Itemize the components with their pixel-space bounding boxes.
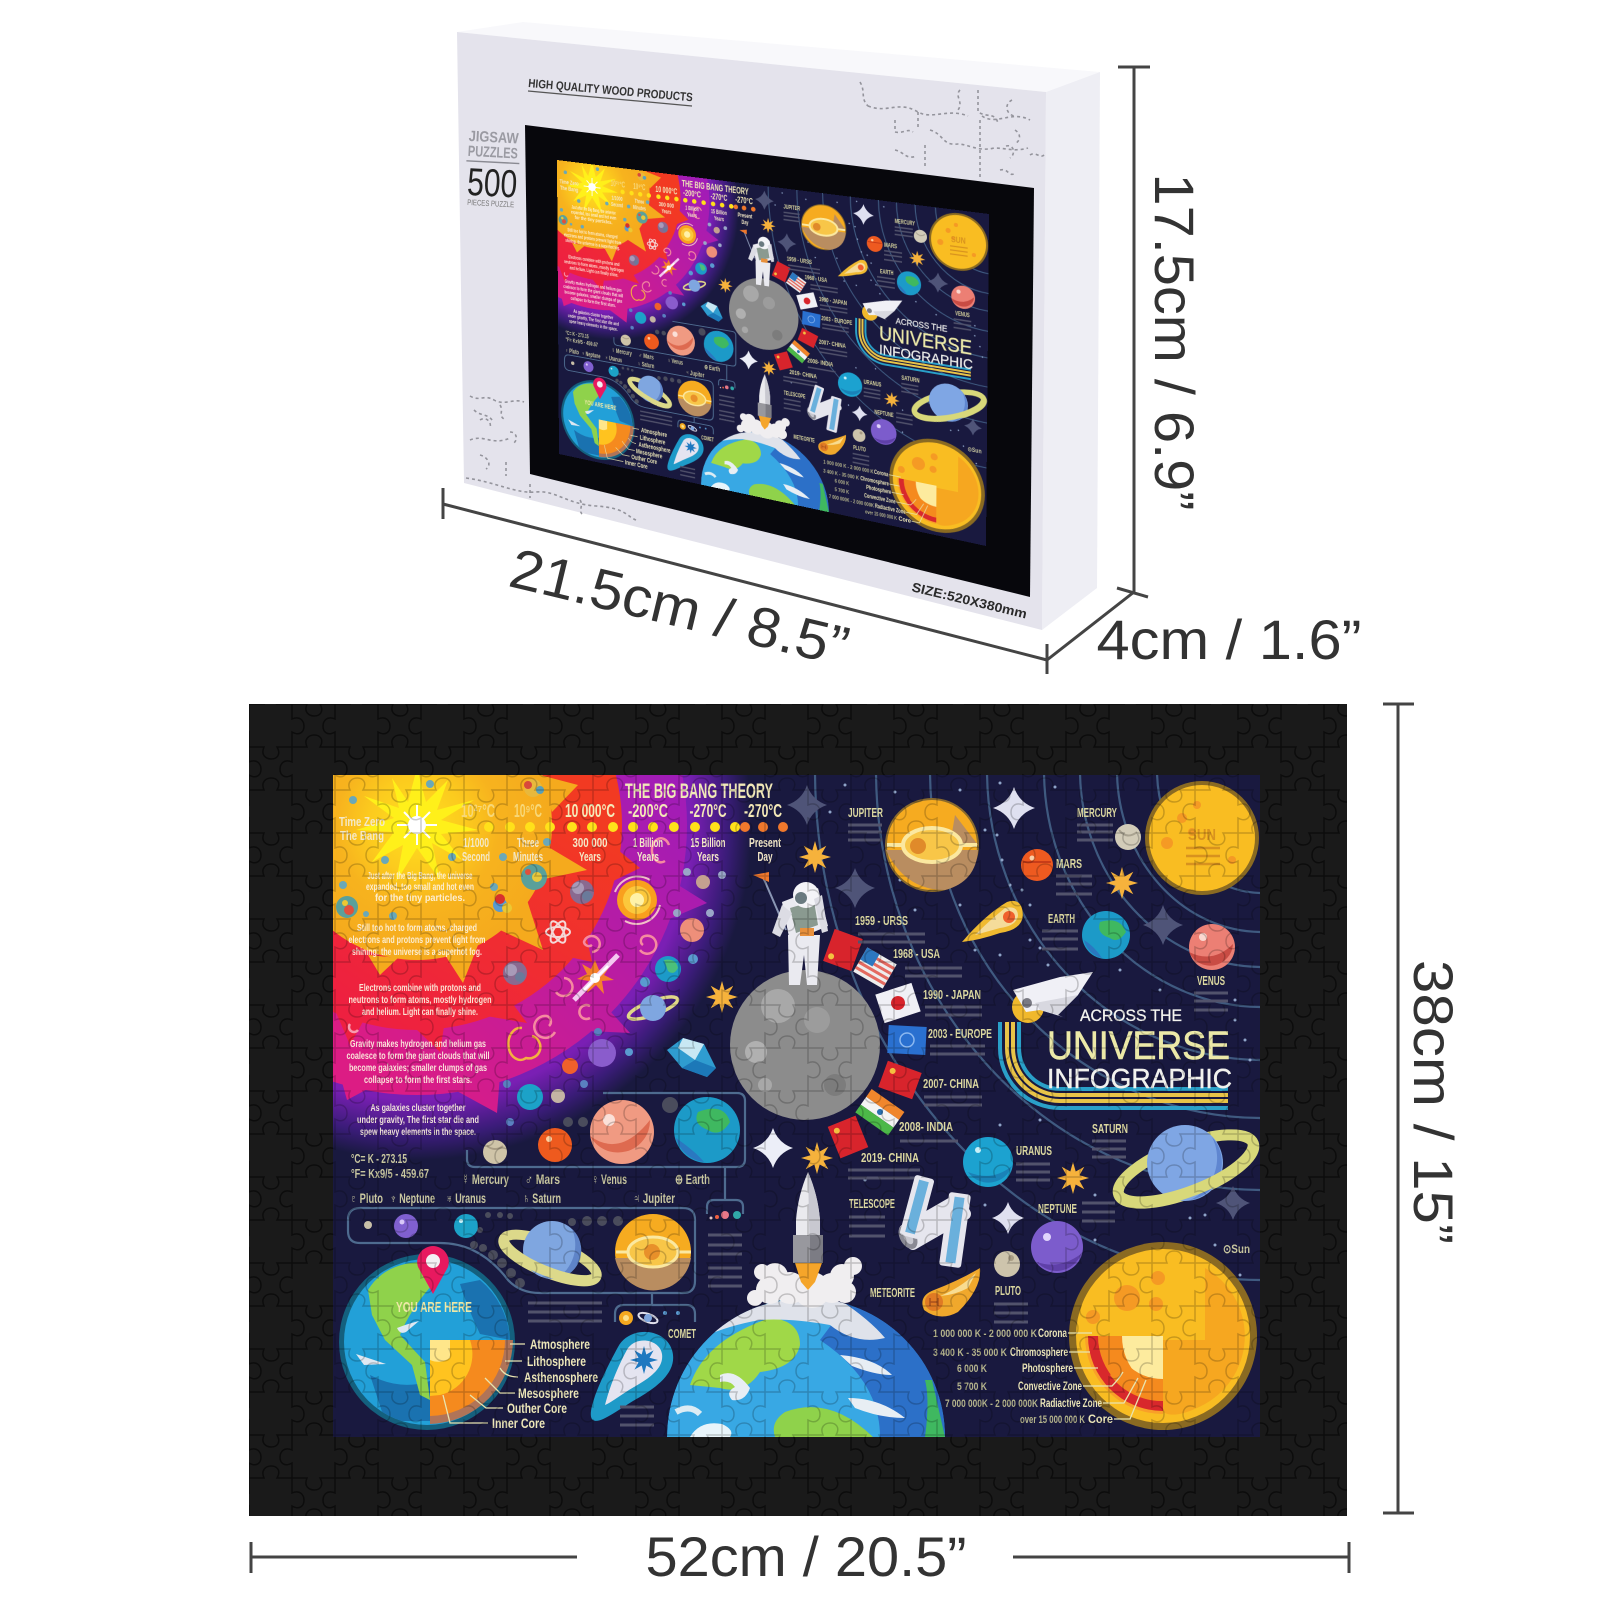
timeline labels: Day (758, 849, 773, 864)
sun layer labels: 1 000 000 K - 2 000 000 K (933, 1328, 1037, 1340)
box front face (457, 32, 1046, 630)
comet icon (591, 1332, 673, 1421)
earth layer labels: Mesosphere (518, 1385, 579, 1401)
timeline dots (484, 822, 788, 832)
sun top: SUN (1188, 827, 1216, 844)
planet symbols row one: ⊕ Earth (675, 1171, 710, 1187)
box heading: HIGH QUALITY WOOD PRODUCTS (528, 76, 693, 104)
timeline labels: Second (462, 849, 490, 864)
main title: ACROSS THE (1080, 1006, 1182, 1025)
box jigsaw puzzles caption (464, 128, 521, 209)
comet top (962, 901, 1023, 942)
scattered stars (828, 782, 1252, 1276)
planet: jupiter medium (615, 1214, 691, 1290)
sparkle stars (753, 785, 1250, 1234)
dimension: box height (1117, 67, 1206, 597)
yellow core with spikes (282, 690, 552, 960)
mission labels: 2007- CHINA (923, 1076, 979, 1091)
sun layer labels: Photosphere (1022, 1361, 1073, 1375)
planet labels right side: METEORITE (870, 1285, 915, 1300)
dimension: box width (443, 488, 1047, 678)
sun cross-section (1069, 1242, 1257, 1430)
timeline temperatures (461, 801, 782, 821)
timeline temperatures: -270°C (744, 801, 782, 821)
timeline temperatures: 10²⁷°C (461, 801, 495, 821)
planet: jupiter large (886, 799, 978, 891)
timeline labels: Years (579, 849, 601, 864)
planet: neptune large (1031, 1221, 1083, 1273)
comet label: COMET (668, 1326, 696, 1341)
planet symbols row two: ♅ Uranus (446, 1190, 486, 1206)
nebulae and atoms in the red ring (503, 880, 594, 985)
big bang paragraphs (346, 871, 492, 1138)
planet: mars medium (538, 1128, 572, 1162)
planet labels right side: VENUS (1197, 973, 1225, 988)
big bang paragraphs: become galaxies; smaller clumps of gas (349, 1063, 487, 1074)
earth layer labels: Inner Core (492, 1415, 545, 1431)
outer planets bracket (348, 1208, 695, 1322)
timeline labels: Years (697, 849, 719, 864)
big bang paragraphs: collapse to form the first stars. (364, 1075, 472, 1086)
dimension: puzzle width: 52cm / 20.5” (646, 1525, 966, 1588)
box jigsaw puzzles caption: PUZZLES (467, 143, 518, 162)
space telescope (895, 1174, 973, 1268)
planet: saturn medium (498, 1221, 602, 1291)
timeline labels: 15 Billion (690, 835, 726, 850)
timeline labels: Years (637, 849, 659, 864)
orbit lines (670, 186, 1260, 1282)
mission labels (848, 913, 992, 1178)
cross-section earth (339, 1254, 515, 1430)
galaxy streak (574, 955, 618, 1000)
mission labels: 2008- INDIA (899, 1119, 953, 1134)
meteorite (922, 1268, 980, 1317)
timeline labels: The Bang (340, 828, 384, 843)
timeline labels: Three (517, 835, 539, 850)
planet: earth large (1082, 911, 1130, 959)
box jigsaw puzzles caption: 500 (466, 161, 518, 206)
planet: venus medium (590, 1100, 654, 1164)
planet: pluto large (994, 1251, 1020, 1277)
mission labels: 2003 - EUROPE (928, 1026, 992, 1041)
planet: venus large (1189, 924, 1235, 970)
dimension: box depth (1047, 592, 1362, 671)
big earth (667, 1298, 945, 1576)
timeline labels: Minutes (513, 849, 543, 864)
temperature formulas: °F= Kx9/5 - 459.67 (351, 1166, 429, 1181)
big bang paragraphs: Still too hot to form atoms, charged (357, 923, 477, 934)
sun top (1145, 781, 1259, 895)
sun-like spiral star (615, 876, 660, 924)
timeline temperatures: -200°C (628, 801, 668, 821)
big bang paragraphs: As galaxies cluster together (370, 1103, 466, 1114)
earth layer labels (443, 1336, 598, 1431)
planet labels right side: TELESCOPE (849, 1196, 895, 1211)
sun layer labels: Corona (1038, 1326, 1067, 1340)
sun layer labels: 7 000 000K - 2 000 000K (945, 1398, 1038, 1410)
planet: earth medium (674, 1097, 740, 1163)
big bang paragraphs: Just after the Big Bang, the universe (368, 871, 473, 882)
timeline labels: Present (749, 835, 781, 850)
location pin (417, 1246, 449, 1294)
earth layer labels: Outher Core (507, 1400, 567, 1416)
planet: pluto small (364, 1221, 372, 1229)
temperature formulas (351, 1151, 429, 1181)
particles in the core (336, 779, 551, 920)
mission labels: 1959 - URSS (855, 913, 908, 928)
dimension: puzzle height: 38cm / 15” (1402, 960, 1465, 1244)
mini sun and saturn icons (619, 1311, 680, 1325)
big bang paragraphs: shining: the universe is a superhot fog. (352, 947, 482, 958)
comet label (620, 1326, 696, 1425)
puzzle artwork (333, 160, 1260, 1437)
dimension: box depth: 4cm / 1.6” (1096, 608, 1362, 671)
big bang paragraphs: neutrons to form atoms, mostly hydrogen (348, 995, 492, 1006)
assembled puzzle board (249, 704, 1347, 1516)
dimension: puzzle width (251, 1525, 1349, 1588)
box side face (1042, 72, 1100, 630)
planet: mercury small (483, 1140, 507, 1164)
mission labels: 2019- CHINA (861, 1150, 919, 1165)
big bang paragraphs: coalesce to form the giant clouds that will (346, 1051, 490, 1062)
planet symbols row two (350, 1190, 675, 1206)
spiral galaxies (349, 838, 669, 1060)
big bang paragraphs: for the tiny particles. (375, 893, 465, 904)
mission labels: 1990 - JAPAN (923, 987, 981, 1002)
text placeholders beneath brackets (528, 1211, 742, 1321)
planet: mars large (1021, 849, 1053, 881)
planet labels right side: SATURN (1092, 1121, 1128, 1136)
rocket (793, 1172, 823, 1290)
timeline labels: 1 Billion (633, 835, 663, 850)
earth layer labels: Lithosphere (527, 1353, 586, 1369)
planet: mercury large (1115, 824, 1141, 850)
box size label: SIZE:520X380mm (910, 579, 1029, 621)
puzzle box (457, 22, 1100, 630)
moon (730, 970, 880, 1120)
planet symbols row one (462, 1171, 710, 1187)
planet symbols row two: ♄ Saturn (523, 1190, 561, 1206)
planet: neptune small (394, 1214, 418, 1238)
main title: UNIVERSE (1047, 1024, 1230, 1068)
astronaut with flag (753, 872, 828, 985)
box jigsaw puzzles caption: PIECES PUZZLE (467, 198, 514, 209)
planet symbols row one: ♀ Venus (592, 1171, 627, 1187)
big bang paragraphs: Electrons combine with protons and (359, 983, 481, 994)
planet labels right side: ⊙Sun (1223, 1242, 1250, 1256)
planet labels right side: EARTH (1048, 911, 1075, 926)
box top face (457, 22, 1100, 92)
planet symbols row two: ♃ Jupiter (633, 1190, 675, 1206)
jigsaw imprint marks on box (466, 82, 1044, 520)
sun layer labels: Core (1088, 1412, 1113, 1426)
big bang paragraphs: electrons and protons prevent light from (348, 935, 486, 946)
dimension: box width: 21.5cm / 8.5” (504, 536, 855, 678)
ice crystal (667, 1038, 716, 1077)
planet: uranus small (454, 1214, 478, 1238)
red ring with spikes (212, 620, 640, 1052)
space shuttle (1012, 972, 1093, 1023)
mission labels: 1968 - USA (893, 946, 940, 961)
planet labels right side: URANUS (1016, 1143, 1052, 1158)
big bang burst (356, 768, 478, 882)
main title (1047, 1006, 1232, 1094)
decorative gray dots (470, 1097, 678, 1288)
sun layer labels: 5 700 K (957, 1381, 987, 1393)
black panel on box (525, 125, 1034, 597)
dimension: puzzle height (1383, 704, 1465, 1513)
title rainbow stripes (1000, 1022, 1228, 1108)
earth layer labels: Atmosphere (530, 1336, 590, 1352)
timeline labels: 1/1000 (463, 835, 489, 850)
artwork thumbnail on box (557, 160, 989, 546)
timeline temperatures: 10⁹°C (514, 801, 542, 821)
orange burst stars (706, 841, 1138, 1194)
sun layer labels: Chromosphere (1010, 1345, 1068, 1359)
big bang paragraphs: Gravity makes hydrogen and helium gas (350, 1039, 486, 1050)
earth layer labels: Asthenosphere (524, 1369, 598, 1385)
space background (333, 775, 1260, 1437)
planet labels right side: MERCURY (1077, 805, 1117, 820)
timeline temperatures: -270°C (690, 801, 726, 821)
dimension: box height: 17.5cm / 6.9” (1143, 174, 1206, 510)
big bang title: THE BIG BANG THEORY (625, 780, 773, 803)
flags on the moon (823, 929, 927, 1158)
planet: saturn large (1110, 1121, 1262, 1217)
you are here label: YOU ARE HERE (396, 1299, 472, 1316)
timeline labels (339, 814, 781, 864)
sun layer labels: Radiactive Zone (1040, 1396, 1102, 1410)
magenta ring with spikes (147, 555, 707, 1113)
jigsaw piece cuts on artwork (333, 775, 1260, 1437)
planet labels right side (848, 805, 1250, 1322)
jigsaw piece cuts on border (249, 704, 1347, 1516)
planet symbols row two: ♇ Pluto (350, 1190, 383, 1206)
planet labels right side: PLUTO (995, 1283, 1021, 1298)
launch smoke (747, 1257, 862, 1308)
planet symbols row two: ♆ Neptune (390, 1190, 435, 1206)
planet symbols row one: ☿ Mercury (462, 1171, 509, 1187)
planet labels right side: MARS (1056, 856, 1082, 871)
purple outer ring (82, 490, 752, 1160)
sun layer labels: Convective Zone (1018, 1379, 1082, 1393)
planet labels right side: NEPTUNE (1038, 1201, 1077, 1216)
timeline labels: Time Zero (339, 814, 385, 829)
planet: uranus large (963, 1137, 1013, 1187)
big bang paragraphs: under gravity, The first star die and (357, 1115, 479, 1126)
inner planets bracket (467, 1093, 745, 1214)
box jigsaw puzzles caption: JIGSAW (468, 128, 520, 148)
temperature formulas: °C= K - 273.15 (351, 1151, 407, 1166)
sun layer labels: 3 400 K - 35 000 K (933, 1347, 1007, 1359)
timeline labels: 300 000 (572, 835, 608, 850)
sun layer labels: over 15 000 000 K (1020, 1414, 1085, 1426)
planet labels right side: JUPITER (848, 805, 883, 820)
timeline temperatures: 10 000°C (565, 801, 615, 821)
big bang paragraphs: expanded, too small and hot even (366, 882, 474, 893)
small planets in the arc (503, 868, 726, 1126)
planet symbols row one: ♂ Mars (525, 1171, 560, 1187)
big bang paragraphs: and helium. Light can finally shine. (362, 1007, 478, 1018)
main title: INFOGRAPHIC (1047, 1063, 1232, 1094)
sun layer labels: 6 000 K (957, 1363, 987, 1375)
sun layer labels (933, 1326, 1146, 1426)
big bang paragraphs: spew heavy elements in the space. (360, 1127, 476, 1138)
